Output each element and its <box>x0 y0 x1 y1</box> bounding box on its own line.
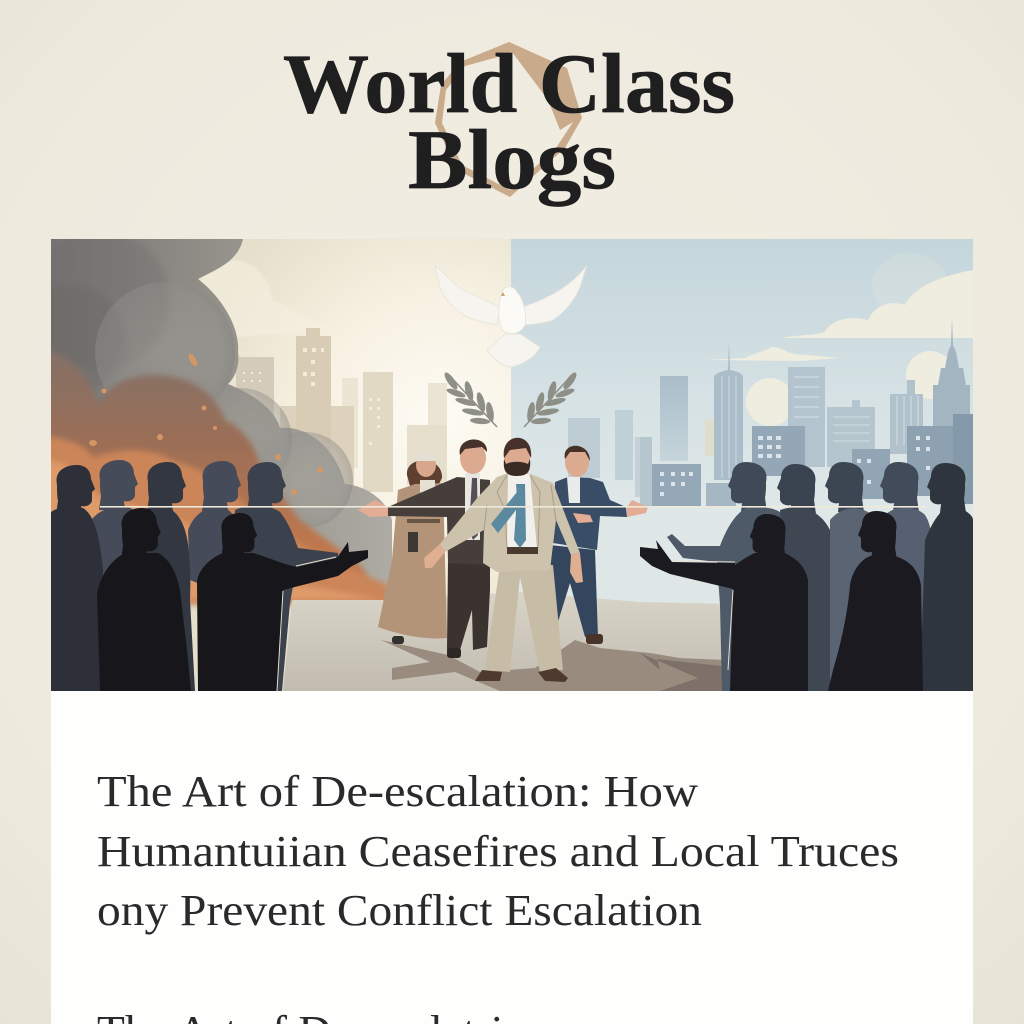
hero illustration panel <box>15 230 973 691</box>
woman in tan coat <box>378 450 447 644</box>
article panel <box>51 691 973 1024</box>
logo emblem: hexagon ring <box>435 42 582 197</box>
olive branch left <box>442 371 497 427</box>
truce line <box>100 506 925 508</box>
fire glow <box>45 349 390 605</box>
ground <box>283 592 735 691</box>
man in navy suit <box>550 446 648 644</box>
front crowd left <box>97 508 368 691</box>
logo header <box>283 37 735 207</box>
title: World Class Blogs: World Class <box>283 37 735 131</box>
lead negotiator in beige suit <box>424 438 583 682</box>
man in dark suit <box>358 440 490 658</box>
title: World Class Blogs: Blogs <box>408 113 616 207</box>
smoke cloud <box>51 239 392 594</box>
clouds left <box>200 260 274 336</box>
dove <box>435 265 587 367</box>
embers <box>89 354 323 495</box>
back-row crowd right <box>667 462 973 691</box>
sky: cool right half <box>511 239 973 604</box>
skyline: right buildings <box>568 318 973 507</box>
back-row crowd left <box>51 460 338 691</box>
cast shadows on ground <box>381 640 725 691</box>
article heading: The Art of De-escalation: How <box>97 767 698 816</box>
clouds right <box>708 270 973 426</box>
sky: warm left half <box>190 239 511 691</box>
article heading: Humantuiian Ceasefires and Local Truces <box>97 827 899 876</box>
article heading: ony Prevent Conflict Escalation <box>97 886 702 935</box>
front crowd right <box>640 511 923 691</box>
olive branch right <box>524 371 579 427</box>
skyline: left buildings <box>236 328 447 496</box>
